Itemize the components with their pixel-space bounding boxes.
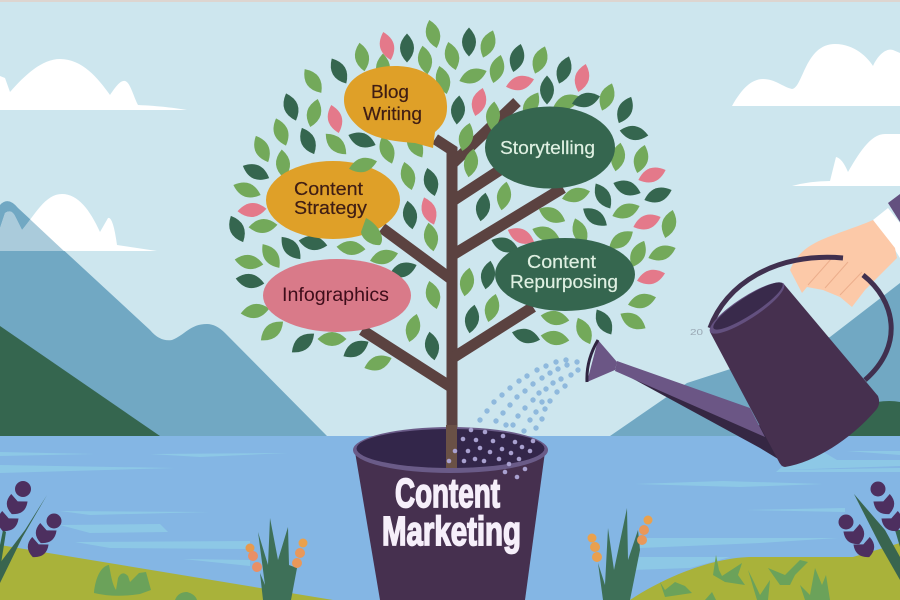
bubble: Storytelling — [485, 106, 615, 188]
mountain: left blue — [0, 201, 327, 436]
plant: left centre with orange buds — [246, 518, 308, 600]
bubble: Storytelling: Storytelling — [500, 138, 595, 158]
bubble: Content Repurposing: Repurposing — [510, 272, 618, 292]
bubble: Infographics: Infographics — [282, 285, 389, 306]
ground: right bank — [630, 543, 900, 600]
watering can — [587, 257, 891, 467]
tree foliage — [225, 18, 680, 375]
ground: left bank — [0, 545, 333, 600]
small label 20: 20 — [690, 328, 704, 337]
clouds: top right — [732, 44, 900, 106]
bubble: Blog Writing: Blog — [371, 82, 409, 102]
mountain: right blue — [610, 283, 900, 436]
lake — [0, 436, 900, 600]
flower pot — [353, 427, 548, 600]
plant: right centre with orange buds — [588, 508, 652, 600]
bubble: Blog Writing — [344, 66, 447, 148]
can handle — [710, 257, 891, 380]
pot title: Content Marketing: Content — [395, 470, 500, 516]
mountain haze over cloud — [0, 212, 64, 251]
trunk inside pot — [446, 425, 457, 468]
cloud: left middle — [0, 194, 157, 251]
can body — [710, 283, 879, 467]
plant: left purple flowers — [0, 481, 61, 583]
leaf over Blog bubble — [347, 154, 379, 176]
bubble: Blog Writing: Writing — [363, 104, 422, 124]
water drops in pot — [447, 428, 535, 479]
water ripples — [0, 450, 900, 570]
tree trunk and branches — [362, 102, 563, 468]
mountain: right dark green — [830, 401, 900, 436]
bubble: Content Strategy: Content — [294, 179, 363, 199]
bubble: Content Strategy — [266, 161, 400, 239]
bubble: Content Repurposing: Content — [527, 252, 596, 272]
plant: right purple flowers — [838, 482, 900, 580]
leaf on Content Strategy bubble — [361, 218, 382, 245]
pot title: Content Marketing — [382, 470, 521, 554]
grass tufts — [94, 555, 830, 600]
bubble: Content Strategy: Strategy — [294, 198, 367, 218]
can mouth — [704, 275, 790, 341]
mountain: left dark green — [0, 326, 160, 436]
water drops falling — [477, 357, 581, 434]
cloud: top left — [0, 59, 187, 110]
bubble: Content Repurposing — [495, 238, 635, 311]
cloud: right middle — [792, 134, 900, 186]
pot title: Content Marketing: Marketing — [382, 508, 521, 554]
hand holding watering can — [790, 194, 900, 307]
can spout — [587, 340, 783, 462]
bubble: Infographics — [263, 259, 411, 332]
